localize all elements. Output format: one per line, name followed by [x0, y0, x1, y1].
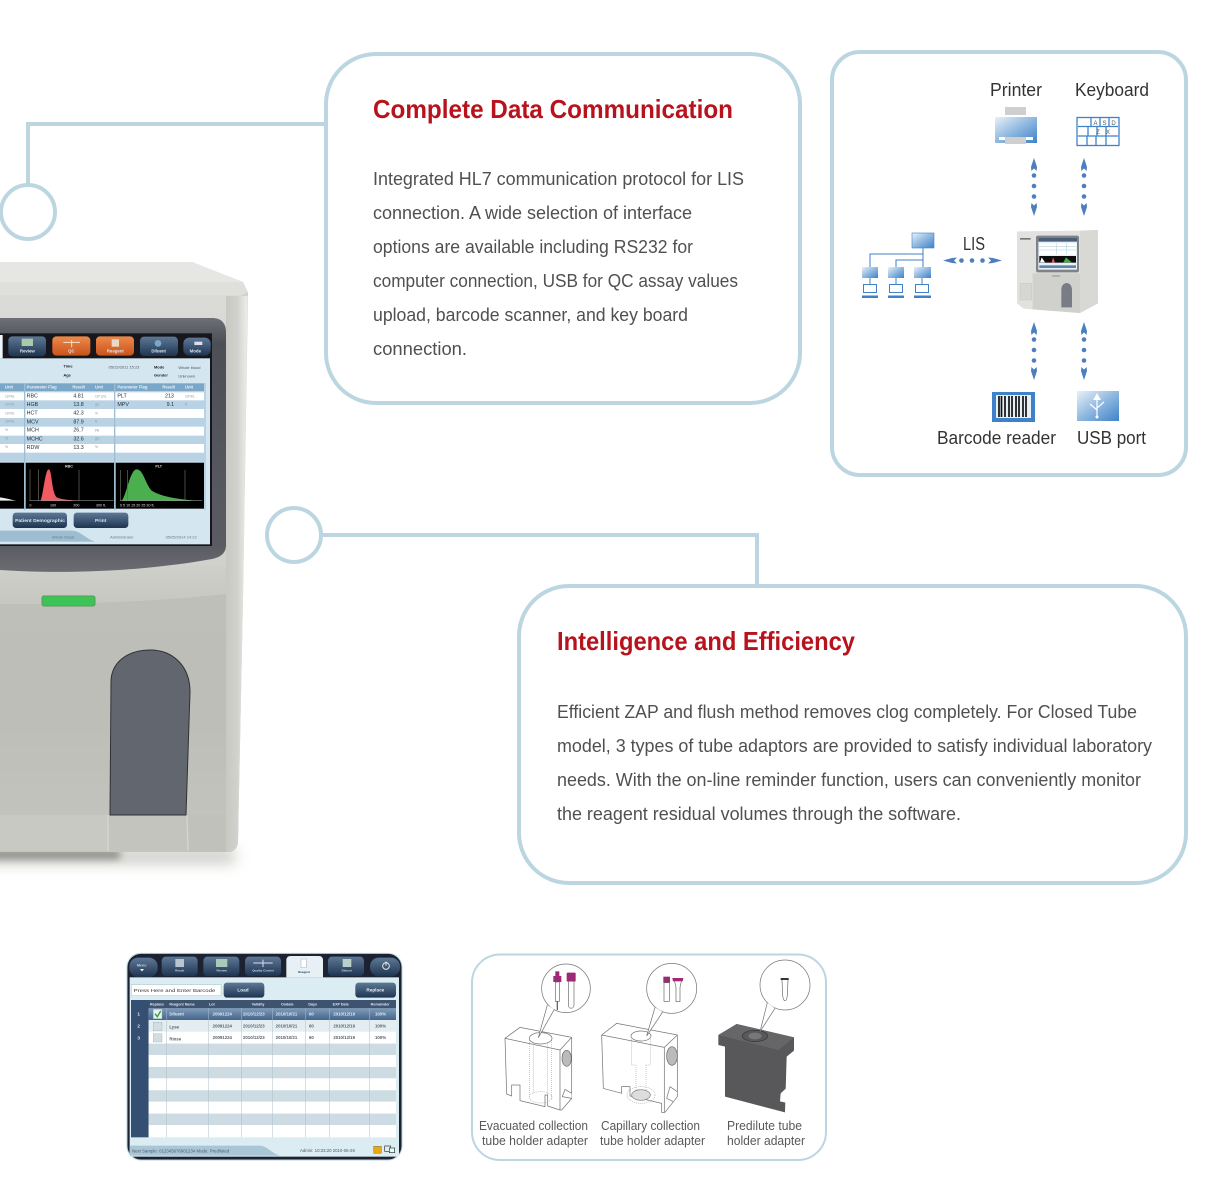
label: LIS: LIS [963, 234, 985, 254]
caption: evacuated collection tube holder adapter [479, 1119, 588, 1148]
status bar: Whole blood [52, 534, 74, 539]
barcode input and buttons: Press Here and Enter Barcode [134, 988, 216, 994]
patient info: Age [63, 373, 72, 378]
result table: 4.81 [73, 394, 84, 400]
caption: predilute tube holder adapter: holder adapter [727, 1134, 805, 1148]
reagent table: 1 [137, 1012, 140, 1017]
result table: HGB [27, 402, 39, 408]
result table: Result [72, 385, 86, 390]
result table: % [95, 445, 98, 449]
connector: upper callout line and ring [1, 124, 326, 239]
patient info: Time [63, 364, 73, 369]
barcode input and buttons: Load [237, 988, 249, 993]
text block: communication description: computer connection, USB for QC assay values [373, 271, 738, 291]
result table: MCH [27, 428, 39, 434]
result table: 10^9/L [185, 394, 195, 398]
reagent table: Ondate [281, 1002, 294, 1006]
reagent table: 20091224 [213, 1012, 233, 1017]
text block: communication description: upload, barcode scanner, and key board [373, 305, 688, 325]
reagent table: 20091224 [213, 1035, 233, 1040]
result table: RDW [27, 445, 40, 451]
result table: % [5, 428, 8, 432]
connector: lower callout line and ring [267, 508, 757, 586]
text block: efficiency description: the reagent residual volumes through the software. [557, 804, 961, 824]
histograms: PLT [155, 464, 163, 468]
panel: connectivity diagram [832, 52, 1186, 475]
text block: efficiency description: model, 3 types of tube adaptors are provided to satisfy individual laboratory [557, 736, 1152, 756]
result table: RBC [27, 394, 38, 400]
result table: % [95, 411, 98, 415]
reagent table: 100% [375, 1024, 386, 1029]
reagent table: Replace [150, 1002, 164, 1006]
software tabs: Review [217, 969, 227, 973]
screen tabs: QC [68, 349, 75, 354]
icon: keyboard: D [1111, 121, 1116, 127]
barcode input and buttons: Replace [366, 988, 385, 993]
software tabs: Reagent [298, 970, 310, 974]
text block: communication description [373, 169, 744, 359]
reagent table: 2010/10/21 [276, 1035, 298, 1040]
result table [0, 383, 206, 510]
icon: barcode reader [992, 392, 1035, 422]
patient info: Gender [154, 373, 168, 378]
reagent table: 3 [137, 1036, 140, 1041]
arrow: barcode link [1031, 322, 1037, 380]
software tabs: Result [175, 969, 184, 973]
result table: 213 [165, 394, 174, 400]
result table: fL [185, 402, 188, 406]
software status bar: Next Sample: 012345678901234 Mode: Prediluted [132, 1149, 230, 1154]
software tabs: Menu [137, 964, 146, 968]
result table: fL [95, 420, 98, 424]
icon: printer [995, 107, 1037, 144]
result table: PLT [117, 394, 127, 400]
panel: Intelligence and Efficiency [519, 586, 1186, 883]
screen buttons: Patient Demographic [15, 518, 65, 524]
device body [0, 262, 248, 852]
reagent table: Reagent Name [169, 1002, 195, 1006]
reagent table: 2 [137, 1024, 140, 1029]
label: Barcode reader: Barcode reader [937, 428, 1056, 448]
label: USB port: USB port [1077, 428, 1146, 448]
heading: Complete Data Communication: Complete Data Communication [373, 94, 733, 124]
software status bar: Admin: 10:33:20 2010-05-26 [300, 1148, 355, 1153]
reagent software screenshot [127, 953, 402, 1160]
result table: % [5, 436, 8, 440]
text block: communication description: connection. [373, 339, 467, 359]
result table: 13.3 [73, 445, 84, 451]
reagent table: Days [308, 1002, 317, 1006]
result table: g/L [95, 436, 100, 440]
result table: 87.9 [73, 419, 84, 425]
patient info: Unknown [178, 373, 195, 378]
caption: capillary collection tube holder adapter: Capillary collection [601, 1119, 700, 1133]
result table: 10^9/L [5, 394, 15, 398]
result table: % [5, 445, 8, 449]
arrow: printer link [1031, 158, 1037, 216]
indicator light [42, 596, 95, 606]
result table: pg [95, 428, 99, 432]
icon: keyboard: X [1106, 130, 1110, 136]
illustration: predilute adapter [718, 960, 810, 1112]
reagent table: 20091224 [213, 1024, 233, 1029]
reagent table: 2010/12/19 [333, 1035, 356, 1040]
reagent table: EXP Date [333, 1002, 349, 1006]
patient info: Mode [154, 364, 165, 369]
text block: communication description: options are available including RS232 for [373, 237, 693, 257]
reagent table: Lot [209, 1002, 215, 1006]
reagent table: 2010/12/23 [243, 1035, 265, 1040]
software tabs [129, 956, 400, 977]
result table: Parameter Flag [117, 385, 148, 390]
icon: keyboard: S [1102, 121, 1107, 127]
icon: keyboard: Z [1096, 130, 1100, 136]
icon: keyboard [1077, 118, 1119, 146]
histograms: 300 fL [96, 504, 106, 508]
text block: communication description: Integrated HL7 communication protocol for LIS [373, 169, 744, 189]
screen tabs: Reagent [107, 349, 124, 354]
histograms: 0 5 10 15 20 25 30 fL [120, 504, 155, 508]
analyzer device photo [0, 262, 248, 864]
result table: 32.6 [73, 436, 84, 442]
screen tabs: Diluent [151, 349, 167, 354]
patient info: Whole blood [178, 365, 200, 370]
panel: tube holder adapters [472, 954, 826, 1160]
result table: 10^9/L [5, 420, 15, 424]
reagent table: 2010/12/23 [243, 1024, 265, 1029]
screen buttons [13, 513, 128, 528]
reagent table: 100% [375, 1012, 386, 1017]
screen bezel [0, 318, 226, 572]
caption: predilute tube holder adapter: Predilute tube [727, 1119, 802, 1133]
reagent table: Diluent [169, 1012, 185, 1017]
result table: 9.1 [167, 402, 174, 408]
sample door [110, 650, 190, 815]
reagent table: 100% [375, 1035, 386, 1040]
software status bar [130, 1146, 395, 1156]
label: Printer: Printer [990, 80, 1042, 100]
status bar: 05/05/2014 14:22 [166, 534, 197, 539]
heading: Intelligence and Efficiency: Intelligence and Efficiency [557, 626, 855, 656]
histograms [0, 463, 204, 509]
histograms: 200 [73, 504, 79, 508]
histograms: 100 [50, 504, 56, 508]
arrow: LIS link [943, 258, 1002, 264]
barcode input and buttons [131, 983, 396, 998]
icon: LIS network [862, 233, 934, 298]
caption: capillary collection tube holder adapter: tube holder adapter [600, 1134, 705, 1148]
reagent table: 2010/10/21 [276, 1024, 298, 1029]
text block: efficiency description [557, 702, 1152, 824]
panel: Complete Data Communication [326, 54, 800, 403]
reagent table: 2010/12/23 [243, 1012, 265, 1017]
reagent table: Validity [252, 1002, 265, 1006]
arrow: USB link [1081, 322, 1087, 380]
icon: keyboard: A [1093, 121, 1098, 127]
result table: Unit [5, 385, 14, 390]
screen tabs: Mode [190, 349, 202, 354]
screen tabs: Review [20, 349, 35, 354]
histograms: RBC [65, 464, 73, 468]
reagent table: 60 [309, 1035, 314, 1040]
software tabs: Diluent [342, 969, 352, 973]
text block: efficiency description: Efficient ZAP and flush method removes clog completely. For Closed Tube [557, 702, 1137, 722]
illustration: capillary collection adapter [602, 963, 697, 1112]
result table: 10^9/L [5, 411, 15, 415]
arrow: keyboard link [1081, 158, 1087, 216]
caption: predilute tube holder adapter [727, 1119, 805, 1148]
result table: Unit [95, 385, 104, 390]
caption: evacuated collection tube holder adapter: Evacuated collection [479, 1119, 588, 1133]
device shadow [0, 848, 235, 864]
result table: MCV [27, 419, 39, 425]
status bar: Administrator [110, 534, 134, 539]
result table: Result [162, 385, 176, 390]
illustration: evacuated collection adapter [505, 964, 590, 1110]
histograms: 0 [29, 504, 31, 508]
status bar [0, 531, 197, 542]
patient info [63, 364, 200, 378]
label: Keyboard: Keyboard [1075, 80, 1149, 100]
reagent table [131, 1000, 396, 1137]
reagent table: 2010/12/19 [333, 1012, 356, 1017]
result table: 26.7 [73, 428, 84, 434]
screen buttons: Print [95, 518, 107, 524]
icon: analyzer miniature [1017, 230, 1098, 313]
result table: 42.3 [73, 411, 84, 417]
caption: capillary collection tube holder adapter [600, 1119, 705, 1148]
software tabs: Quality Control [252, 969, 274, 973]
result table: HCT [27, 411, 38, 417]
result table: 10^9/L [5, 402, 15, 406]
text block: efficiency description: needs. With the on-line reminder function, users can conveniently monitor [557, 770, 1141, 790]
reagent table: Remainder [371, 1002, 390, 1006]
icon: USB port [1077, 391, 1119, 421]
result table: g/L [95, 402, 100, 406]
reagent table: 60 [309, 1024, 314, 1029]
result table: 10^12/L [95, 394, 107, 398]
reagent table: 2010/10/21 [276, 1012, 298, 1017]
result table: Parameter Flag [27, 385, 57, 390]
reagent table: Rinse [169, 1036, 182, 1041]
result table: 13.8 [73, 402, 84, 408]
screen tabs [0, 335, 211, 358]
caption: evacuated collection tube holder adapter: tube holder adapter [482, 1134, 588, 1148]
text block: communication description: connection. A wide selection of interface [373, 203, 692, 223]
result table: Unit [185, 385, 194, 390]
touch screen [0, 333, 212, 546]
result table: MPV [117, 402, 129, 408]
reagent table: 60 [309, 1012, 314, 1017]
result table: MCHC [27, 436, 43, 442]
reagent table: Lyse [169, 1024, 180, 1029]
patient info: 05/23/2011 15:23 [109, 364, 140, 369]
reagent table: 2010/12/19 [333, 1024, 356, 1029]
